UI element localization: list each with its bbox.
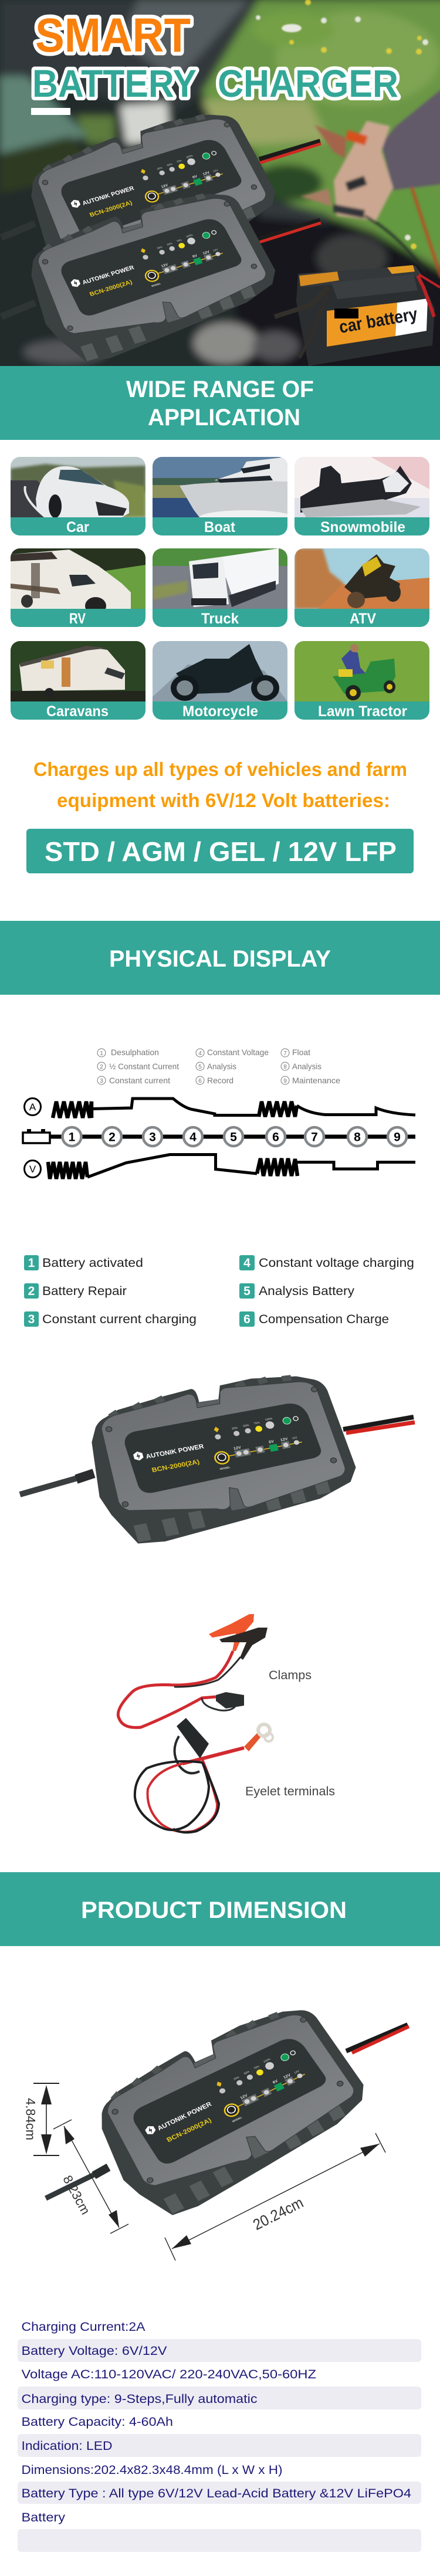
hero: rear charger: 12V bbox=[202, 171, 211, 177]
steps list: Constant current charging bbox=[42, 1313, 197, 1326]
hero: rear charger: 100% bbox=[185, 154, 193, 159]
charger: 12V bbox=[283, 2073, 292, 2080]
hero: front charger: 6V bbox=[192, 253, 198, 259]
section band: wide range of application: APPLICATION bbox=[148, 405, 300, 431]
hero: front charger: 12V bbox=[212, 248, 218, 252]
steps list: 2 bbox=[28, 1284, 35, 1298]
specifications table: Charging type: 9-Steps,Fully automatic bbox=[21, 2392, 258, 2406]
stage markers 1-9: 5 bbox=[230, 1131, 237, 1144]
hero: rear charger: 12V bbox=[161, 184, 169, 189]
product photo: charger: 50% bbox=[243, 1423, 250, 1428]
product photo: charger: 12V bbox=[292, 1436, 298, 1440]
legend: charging stages: 3 bbox=[100, 1078, 103, 1084]
stage markers 1-9: 7 bbox=[311, 1131, 318, 1144]
product photo: charger: AUTONIK POWER bbox=[145, 1443, 205, 1460]
legend: charging stages: Constant current bbox=[109, 1076, 170, 1085]
charger: 75% bbox=[253, 2065, 260, 2070]
specifications table: Battery bbox=[21, 2510, 65, 2524]
stage markers 1-9: 9 bbox=[394, 1131, 401, 1144]
legend: charging stages: 5 bbox=[198, 1064, 202, 1070]
legend: charging stages: 9 bbox=[283, 1078, 287, 1084]
steps list: Compensation Charge bbox=[259, 1313, 389, 1326]
legend: charging stages: Analysis bbox=[207, 1062, 236, 1071]
hero: front charger: MODEL bbox=[151, 282, 161, 287]
specifications table: Voltage AC:110-120VAC/ 220-240VAC,50-60HZ bbox=[21, 2367, 316, 2381]
hero blurred photo background bbox=[0, 0, 440, 378]
hero: front charger: 100% bbox=[185, 233, 193, 238]
legend: charging stages: Analysis bbox=[292, 1062, 321, 1071]
accessory photo: clamps cable bbox=[118, 1614, 268, 1727]
charger bbox=[46, 1992, 409, 2228]
legend: charging stages: Float bbox=[292, 1048, 310, 1057]
chart: charging curve bbox=[23, 1098, 415, 1179]
card: caravans: Caravans bbox=[46, 703, 109, 720]
hero: front charger: 12V bbox=[161, 263, 169, 268]
card: motorcycle bbox=[153, 641, 287, 720]
legend: charging stages: 1 bbox=[100, 1050, 103, 1057]
card: boat: Boat bbox=[204, 519, 236, 535]
length arrow: 20.24cm bbox=[165, 2133, 385, 2260]
steps list bbox=[24, 1255, 414, 1327]
steps list: Battery activated bbox=[42, 1256, 143, 1270]
amps curve bbox=[25, 1098, 415, 1118]
orange text block: charges up all types bbox=[33, 758, 407, 811]
hero: front charger: 12V bbox=[202, 250, 211, 256]
card: car: Car bbox=[66, 519, 89, 535]
hero: rear charger: 50% bbox=[167, 162, 173, 167]
steps list: Constant voltage charging bbox=[259, 1256, 414, 1270]
section band: product dimension: PRODUCT DIMENSION bbox=[81, 1897, 347, 1923]
steps list: Battery Repair bbox=[42, 1284, 127, 1298]
product photo: charger: 75% bbox=[253, 1421, 260, 1425]
charger: 6V bbox=[272, 2079, 279, 2085]
length arrow: 20.24cm: 20.24cm bbox=[250, 2194, 306, 2233]
hero: car battery with clamps bbox=[275, 265, 440, 366]
hero: front charger: 75% bbox=[176, 239, 182, 243]
hero: arm and hand bbox=[300, 90, 440, 278]
stage markers 1-9: 6 bbox=[272, 1131, 279, 1144]
steps list: Analysis Battery bbox=[259, 1284, 355, 1298]
specifications table: Charging Current:2A bbox=[21, 2320, 145, 2334]
volts curve bbox=[25, 1154, 415, 1179]
hero: rear charger: 6V bbox=[192, 174, 198, 179]
hero: front charger: 50% bbox=[167, 242, 173, 246]
legend: charging stages bbox=[97, 1048, 340, 1085]
card: truck: Truck bbox=[201, 611, 239, 627]
hero: rear charger: 25% bbox=[157, 166, 163, 170]
card: boat bbox=[153, 457, 293, 535]
product photo: charger: MODEL bbox=[219, 1466, 231, 1471]
card: RV bbox=[11, 548, 145, 627]
hero: rear charger: BCN-2000(2A) bbox=[89, 199, 133, 218]
hero: front charger: AUTONIK POWER bbox=[82, 265, 136, 286]
stage line and battery icon bbox=[23, 1129, 415, 1143]
specifications table bbox=[18, 2320, 421, 2552]
product diagram: charger with dimensions bbox=[23, 1992, 409, 2260]
card: truck bbox=[153, 548, 287, 627]
orange text block: charges up all types: equipment with 6V/12 Volt batteries: bbox=[57, 789, 390, 811]
card: snowmobile: Snowmobile bbox=[320, 519, 405, 535]
steps list: 5 bbox=[243, 1284, 251, 1298]
legend: charging stages: 7 bbox=[283, 1050, 287, 1057]
badge: battery types: STD / AGM / GEL / 12V LFP bbox=[45, 836, 397, 867]
charger: 12V bbox=[239, 2093, 249, 2100]
legend: charging stages: Desulphation bbox=[111, 1048, 159, 1057]
height arrow: 4.84cm: 4.84cm bbox=[23, 2098, 38, 2140]
card: lawn tractor: Lawn Tractor bbox=[318, 703, 407, 720]
product photo: charger bbox=[20, 1364, 415, 1551]
stage markers 1-9: 2 bbox=[109, 1131, 116, 1144]
product photo: charger: 25% bbox=[231, 1426, 239, 1431]
section band: wide range of application bbox=[0, 366, 440, 440]
steps list: 4 bbox=[243, 1256, 251, 1270]
hero: car battery with clamps: car battery bbox=[337, 304, 419, 337]
product photo: charger: 100% bbox=[265, 1417, 273, 1422]
legend: charging stages: 4 bbox=[198, 1050, 202, 1057]
hero: front charger: 25% bbox=[157, 246, 163, 250]
hero: front charger bbox=[0, 194, 321, 361]
stage markers 1-9: 8 bbox=[354, 1131, 361, 1144]
specifications table: Battery Capacity: 4-60Ah bbox=[21, 2415, 173, 2429]
hero: rear charger: MODEL bbox=[151, 203, 161, 208]
charger: 100% bbox=[263, 2058, 272, 2064]
amps label: A bbox=[29, 1101, 36, 1113]
badge: battery types bbox=[26, 829, 414, 873]
legend: charging stages: 6 bbox=[198, 1078, 202, 1084]
volts label: V bbox=[29, 1164, 36, 1175]
specifications table: Battery Voltage: 6V/12V bbox=[21, 2344, 167, 2358]
product photo: charger: 6V bbox=[268, 1440, 275, 1445]
hero white accent bar bbox=[31, 108, 70, 115]
card: RV: RV bbox=[69, 611, 86, 627]
specifications table: Battery Type : All type 6V/12V Lead-Acid Battery &12V LiFePO4 bbox=[21, 2486, 411, 2500]
card: ATV: ATV bbox=[350, 611, 376, 627]
hero: rear charger: AUTONIK POWER bbox=[82, 185, 136, 207]
specifications table: Dimensions:202.4x82.3x48.4mm (L x W x H) bbox=[21, 2463, 283, 2477]
steps list: 1 bbox=[28, 1256, 35, 1270]
hero title: BATTERY: BATTERY bbox=[32, 62, 197, 105]
card: snowmobile bbox=[295, 457, 429, 535]
card: caravans bbox=[11, 641, 145, 720]
height arrow: 4.84cm bbox=[23, 2083, 59, 2155]
product photo: charger: 12V bbox=[280, 1437, 289, 1442]
stage markers 1-9: 4 bbox=[189, 1131, 197, 1144]
hero title: CHARGER: CHARGER bbox=[218, 62, 398, 105]
label: clamps: Clamps bbox=[269, 1669, 312, 1682]
stage markers 1-9 bbox=[62, 1127, 407, 1146]
hero: rear charger: 75% bbox=[176, 159, 182, 163]
charger: AUTONIK POWER bbox=[157, 2101, 214, 2132]
legend: charging stages: Constant Voltage bbox=[207, 1048, 269, 1057]
stage markers 1-9: 3 bbox=[149, 1131, 156, 1144]
section band: physical display: PHYSICAL DISPLAY bbox=[109, 946, 331, 972]
stage markers 1-9: 1 bbox=[69, 1131, 76, 1144]
card: lawn tractor bbox=[295, 641, 429, 720]
width arrow: 8.23cm: 8.23cm bbox=[60, 2173, 93, 2217]
card: car bbox=[11, 457, 145, 535]
legend: charging stages: Record bbox=[207, 1076, 233, 1085]
section band: physical display bbox=[0, 921, 440, 995]
legend: charging stages: 2 bbox=[100, 1064, 103, 1070]
charger: 25% bbox=[233, 2076, 241, 2081]
charger: MODEL bbox=[232, 2116, 243, 2123]
label: eyelet terminals: Eyelet terminals bbox=[245, 1785, 335, 1798]
width arrow: 8.23cm bbox=[53, 2120, 128, 2233]
legend: charging stages: Maintenance bbox=[292, 1076, 340, 1085]
orange text block: charges up all types: Charges up all types of vehicles and farm bbox=[33, 758, 407, 780]
product photo: charger: 12V bbox=[233, 1446, 242, 1451]
hero: front charger: BCN-2000(2A) bbox=[89, 279, 133, 298]
hero: grass flowers bbox=[256, 0, 428, 249]
charger: 50% bbox=[243, 2070, 251, 2076]
legend: charging stages: ½ Constant Current bbox=[109, 1062, 179, 1071]
product photo: charger: BCN-2000(2A) bbox=[151, 1459, 201, 1474]
section band: wide range of application: WIDE RANGE OF bbox=[126, 377, 314, 402]
specifications table: Indication: LED bbox=[21, 2439, 113, 2453]
section band: product dimension bbox=[0, 1872, 440, 1946]
accessory photo: eyelet cable bbox=[135, 1718, 273, 1832]
steps list: 6 bbox=[243, 1313, 251, 1326]
card: motorcycle: Motorcycle bbox=[182, 703, 258, 720]
hero: rear charger bbox=[0, 114, 321, 245]
hero panel bbox=[0, 0, 440, 378]
hero title: SMART: SMART bbox=[35, 9, 191, 62]
card: ATV bbox=[295, 548, 429, 627]
steps list: 3 bbox=[28, 1313, 35, 1326]
charger: 12V bbox=[294, 2069, 300, 2075]
charger: BCN-2000(2A) bbox=[165, 2117, 213, 2144]
legend: charging stages: 8 bbox=[283, 1064, 287, 1070]
hero: rear charger: 12V bbox=[212, 169, 218, 172]
